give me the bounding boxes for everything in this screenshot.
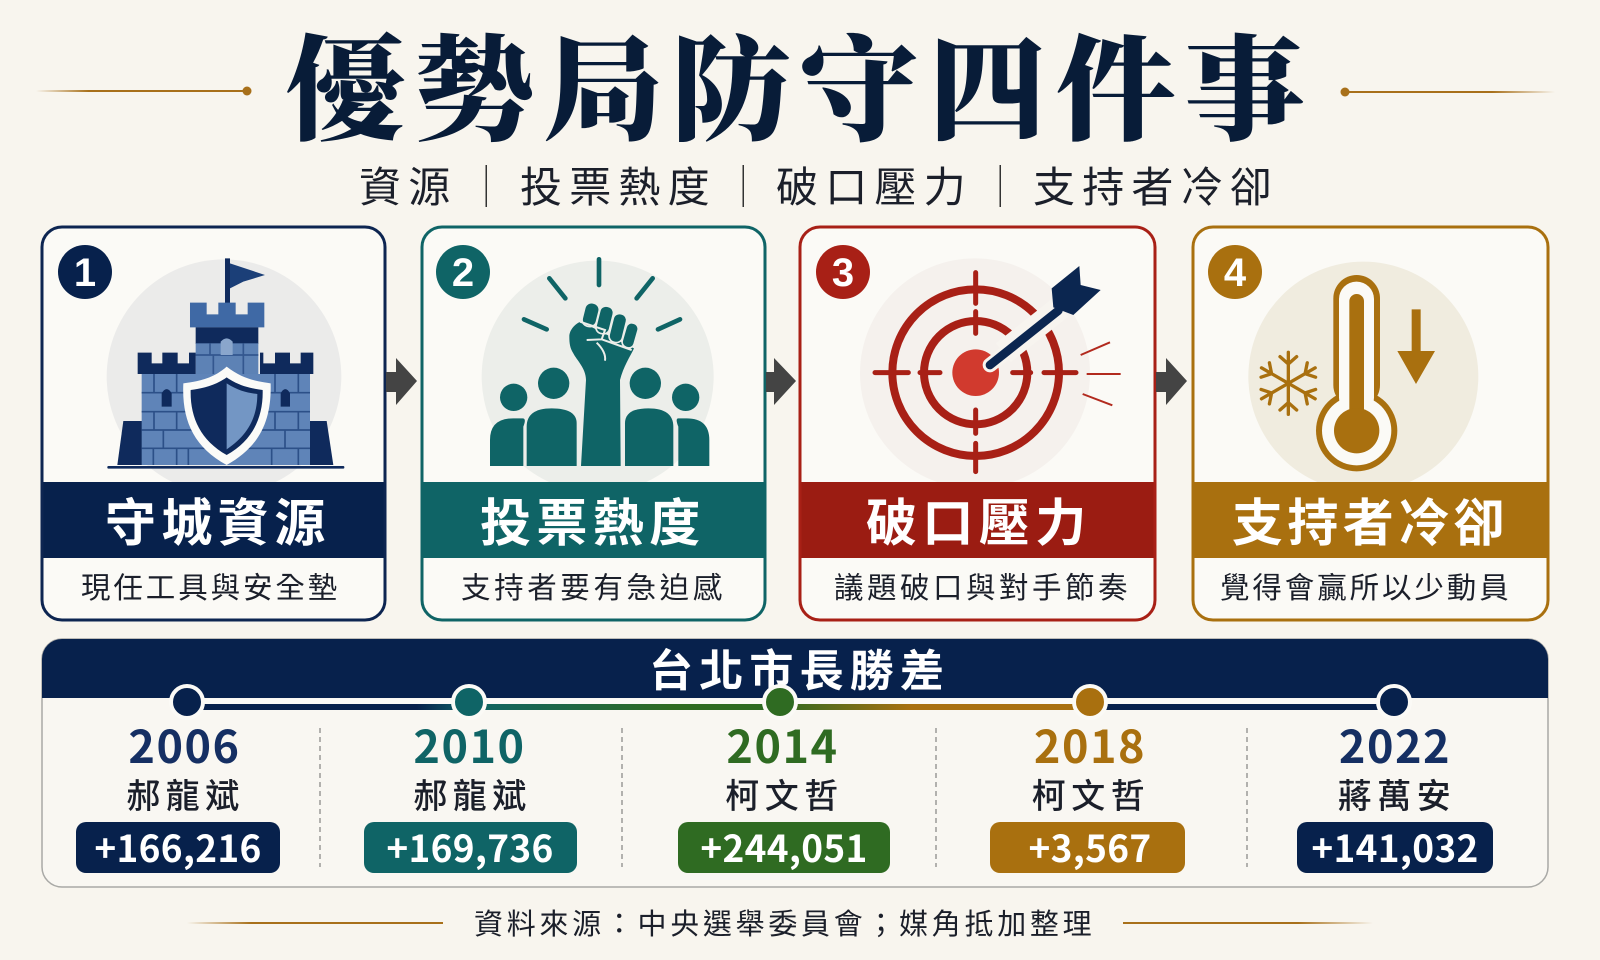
heading: 支持者冷卻 <box>1232 482 1509 556</box>
entry 2010: +169,736 <box>386 819 554 873</box>
entry 2022 <box>1297 711 1493 873</box>
description: 覺得會贏所以少動員 <box>1220 565 1512 607</box>
title ornament: right line <box>1340 88 1555 96</box>
entry 2014: 柯文哲 <box>725 769 844 818</box>
title band <box>42 482 385 558</box>
subtitle: 支持者冷卻 <box>1033 154 1279 215</box>
entry 2014: 2014 <box>726 711 839 776</box>
title band <box>800 482 1155 558</box>
number badge 4: 4 <box>1224 251 1247 295</box>
number badge 1 <box>58 245 112 299</box>
title band <box>1193 482 1548 558</box>
entry 2014 <box>678 711 890 873</box>
panel: card 4 支持者冷卻 <box>1193 227 1548 620</box>
description: 現任工具與安全墊 <box>81 565 340 607</box>
panel header bar <box>42 639 1548 698</box>
heading: 投票熱度 <box>480 482 706 556</box>
number badge 4 <box>1208 245 1262 299</box>
entry 2006: 2006 <box>128 711 241 776</box>
panel: card 1 守城資源 <box>42 227 385 620</box>
panel: card 3 破口壓力 <box>800 227 1155 620</box>
entry 2006: 郝龍斌 <box>126 769 245 818</box>
panel: card 2 投票熱度 <box>422 227 765 620</box>
timeline nodes <box>171 686 1410 718</box>
title: 優勢局防守四件事 <box>286 0 1312 164</box>
subtitle <box>359 154 1279 215</box>
number badge 2: 2 <box>452 251 474 295</box>
number badge 3: 3 <box>832 251 854 295</box>
entry 2022: 蔣萬安 <box>1338 769 1456 818</box>
arrow 2 to 3 <box>766 358 796 405</box>
source note: 資料來源：中央選舉委員會；媒角抵加整理 <box>474 901 1095 943</box>
icon: raised fist and crowd <box>482 259 714 493</box>
description: 議題破口與對手節奏 <box>834 565 1131 607</box>
entry 2018: 2018 <box>1034 711 1146 776</box>
timeline line <box>187 699 1394 710</box>
footer ornament: left line <box>187 922 443 924</box>
entry 2006: +166,216 <box>94 819 262 873</box>
title band <box>422 482 765 558</box>
icon: castle with shield <box>107 258 344 494</box>
entry 2018: +3,567 <box>1029 819 1151 873</box>
icon: thermometer and snowflake <box>1248 262 1478 492</box>
entry 2010: 2010 <box>413 711 526 776</box>
subtitle: 資源 <box>359 154 457 215</box>
number badge 3 <box>816 245 870 299</box>
entry 2018 <box>990 711 1185 873</box>
number badge 2 <box>436 245 490 299</box>
arrow 3 to 4 <box>1156 358 1187 405</box>
description: 支持者要有急迫感 <box>461 565 726 607</box>
entry 2018: 柯文哲 <box>1032 769 1150 818</box>
entry 2022: 2022 <box>1339 711 1451 776</box>
entry 2010 <box>364 711 577 873</box>
panel heading: 台北市長勝差 <box>649 635 950 699</box>
subtitle: 破口壓力 <box>776 154 973 215</box>
icon: target with arrow <box>860 258 1121 488</box>
entry 2022: +141,032 <box>1311 819 1479 873</box>
arrow 1 to 2 <box>386 358 417 405</box>
heading: 守城資源 <box>105 482 331 556</box>
title ornament: left line <box>36 86 252 96</box>
entry 2006 <box>76 711 280 873</box>
panel: Taipei mayor win margins <box>42 635 1548 887</box>
entry 2010: 郝龍斌 <box>413 769 532 818</box>
subtitle: 投票熱度 <box>520 154 717 215</box>
footer ornament: right line <box>1123 922 1373 924</box>
heading: 破口壓力 <box>866 482 1092 556</box>
entry 2014: +244,051 <box>700 819 868 873</box>
number badge 1: 1 <box>74 251 96 295</box>
